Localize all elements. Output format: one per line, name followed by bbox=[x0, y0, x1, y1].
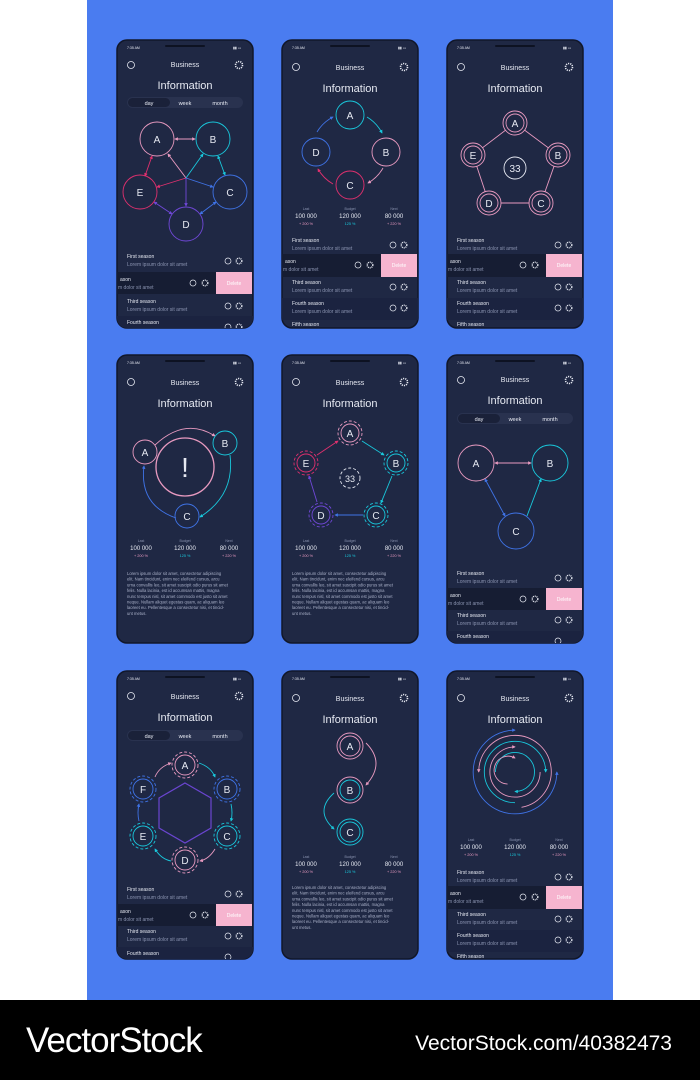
phone 2: circular cycle: Fifth season bbox=[292, 322, 319, 328]
phone 2: circular cycle: ▮▮ ▭ bbox=[398, 46, 407, 50]
phone 2: circular cycle bbox=[282, 40, 418, 328]
phone 4: alert cycle: felis. Nulla lacinia, est id accumsan mattis, magna bbox=[127, 588, 220, 593]
phone 7: hexagon: F bbox=[140, 785, 146, 796]
phone 5: pentagon dashed cycle: Last bbox=[303, 539, 309, 543]
phone 8: vertical flow: felis. Nulla lacinia, est id accumsan mattis, magna bbox=[292, 902, 385, 907]
phone 7: hexagon bbox=[117, 671, 253, 969]
phone 9: spiral rings: + 200 % bbox=[464, 853, 479, 857]
phone 4: alert cycle: C bbox=[183, 512, 191, 523]
phone 7: hexagon: D bbox=[181, 856, 189, 867]
phone 5: pentagon dashed cycle: Budget bbox=[344, 539, 356, 543]
phone 9: spiral rings: Third season bbox=[457, 912, 486, 918]
phone 8: vertical flow: 120 000 bbox=[339, 862, 362, 868]
phone 9: spiral rings: Delete bbox=[557, 895, 571, 901]
phone 9: spiral rings: m dolor sit amet bbox=[448, 899, 484, 905]
phone 7: hexagon: Information bbox=[157, 712, 213, 724]
phone 5: pentagon dashed cycle: 33 bbox=[345, 474, 355, 484]
phone 3: pentagon with 33: 7:35 AM bbox=[457, 46, 470, 50]
phone 2: circular cycle: Third season bbox=[292, 280, 321, 286]
phone 6: triangle: 7:35 AM bbox=[457, 361, 470, 365]
phone 2: circular cycle: C bbox=[346, 181, 354, 192]
phone 5: pentagon dashed cycle: B bbox=[393, 459, 400, 470]
phone 5: pentagon dashed cycle: E bbox=[303, 459, 310, 470]
phone 2: circular cycle: ason bbox=[285, 259, 296, 265]
phone 6: triangle: Fourth season bbox=[457, 634, 489, 640]
phone 3: pentagon with 33: E bbox=[470, 151, 477, 162]
phone 5: pentagon dashed cycle: Information bbox=[322, 398, 378, 410]
phone 9: spiral rings: Lorem ipsum dolor sit amet bbox=[457, 941, 518, 947]
phone 1: five node network: day bbox=[145, 101, 154, 107]
phone 5: pentagon dashed cycle: + 200 % bbox=[299, 554, 314, 558]
phone 4: alert cycle: Last bbox=[138, 539, 144, 543]
phone 5: pentagon dashed cycle bbox=[282, 355, 418, 643]
phone 4: alert cycle: Next bbox=[225, 539, 233, 543]
phone 5: pentagon dashed cycle: D bbox=[317, 511, 325, 522]
phone 8: vertical flow: A bbox=[347, 742, 354, 753]
phone 1: five node network: E bbox=[137, 188, 144, 199]
phone 2: circular cycle: Delete bbox=[392, 263, 406, 269]
phone 3: pentagon with 33: C bbox=[537, 199, 545, 210]
phone 2: circular cycle: 100 000 bbox=[295, 214, 318, 220]
phone 8: vertical flow: unt metus. bbox=[292, 925, 312, 930]
phone 3: pentagon with 33: Fourth season bbox=[457, 301, 489, 307]
phone 2: circular cycle: 7:35 AM bbox=[292, 46, 305, 50]
phone 5: pentagon dashed cycle: laoreet eu. Pellentesque a consectetur nisi, et tincid- bbox=[292, 605, 390, 610]
phone 9: spiral rings: 100 000 bbox=[460, 845, 482, 851]
phone 6: triangle: Business bbox=[501, 377, 530, 384]
phone 1: five node network: Lorem ipsum dolor sit amet bbox=[127, 307, 188, 313]
phone 6: triangle: First season bbox=[457, 571, 484, 577]
phone 4: alert cycle: 7:35 AM bbox=[127, 361, 140, 365]
phone 1: five node network: First season bbox=[127, 254, 154, 260]
phone 8: vertical flow: 80 000 bbox=[385, 862, 404, 868]
phone 5: pentagon dashed cycle: 7:35 AM bbox=[292, 361, 305, 365]
phone 6: triangle: Information bbox=[487, 395, 543, 407]
phone 4: alert cycle: unt metus. bbox=[127, 611, 147, 616]
phone 7: hexagon: Third season bbox=[127, 929, 156, 935]
phone 3: pentagon with 33: ▮▮ ▭ bbox=[563, 46, 572, 50]
phone 7: hexagon: Lorem ipsum dolor sit amet bbox=[127, 895, 188, 901]
phone 1: five node network: month bbox=[212, 101, 228, 107]
phone 4: alert cycle: 80 000 bbox=[220, 546, 239, 552]
phone 6: triangle: C bbox=[512, 527, 520, 538]
phone 5: pentagon dashed cycle: urna convallis leo, sit amet suscipit odio purus sit amet bbox=[292, 582, 394, 587]
phone 3: pentagon with 33: m dolor sit amet bbox=[448, 267, 484, 273]
phone 8: vertical flow: 7:35 AM bbox=[292, 677, 305, 681]
phone 1: five node network: Third season bbox=[127, 299, 156, 305]
phone 6: triangle: week bbox=[508, 417, 522, 423]
phone 4: alert cycle: 125 % bbox=[180, 554, 191, 558]
phone 6: triangle: B bbox=[547, 459, 554, 470]
phone 8: vertical flow: + 220 % bbox=[387, 870, 402, 874]
phone 5: pentagon dashed cycle: neque. Nullam aliquet egestas quam, ac aliquam leo bbox=[292, 600, 390, 604]
phone 6: triangle: ▮▮ ▭ bbox=[563, 361, 572, 365]
phone 6: triangle bbox=[447, 355, 583, 653]
phone 1: five node network: Fourth season bbox=[127, 320, 159, 326]
phone 2: circular cycle: Lorem ipsum dolor sit amet bbox=[292, 246, 353, 252]
phone 8: vertical flow: 100 000 bbox=[295, 862, 318, 868]
phone 5: pentagon dashed cycle: + 220 % bbox=[387, 554, 402, 558]
phone 4: alert cycle: neque. Nullam aliquet egestas quam, ac aliquam leo bbox=[127, 600, 225, 604]
phone 3: pentagon with 33: Lorem ipsum dolor sit amet bbox=[457, 288, 518, 294]
phone 1: five node network: C bbox=[226, 188, 234, 199]
phone 8: vertical flow: 125 % bbox=[345, 870, 356, 874]
phone 5: pentagon dashed cycle: ▮▮ ▭ bbox=[398, 361, 407, 365]
phone 2: circular cycle: A bbox=[347, 111, 354, 122]
phone 5: pentagon dashed cycle: 125 % bbox=[345, 554, 356, 558]
phone 8: vertical flow: ▮▮ ▭ bbox=[398, 677, 407, 681]
phone 8: vertical flow: B bbox=[347, 786, 354, 797]
phone 3: pentagon with 33: Fifth season bbox=[457, 322, 484, 328]
phone 2: circular cycle: Last bbox=[303, 207, 309, 211]
phone 8: vertical flow: Next bbox=[390, 855, 398, 859]
phone 1: five node network: Delete bbox=[227, 281, 241, 287]
phone 8: vertical flow: elit. Nam tincidunt, enim nec eleifend cursus, arcu bbox=[292, 891, 385, 896]
phone 3: pentagon with 33: B bbox=[555, 151, 562, 162]
phone 9: spiral rings: Next bbox=[555, 838, 563, 842]
phone 3: pentagon with 33: D bbox=[485, 199, 493, 210]
phone 6: triangle: Lorem ipsum dolor sit amet bbox=[457, 621, 518, 627]
footer: watermark bar bbox=[0, 1000, 700, 1080]
phone 4: alert cycle bbox=[117, 355, 253, 643]
phone 2: circular cycle: + 200 % bbox=[299, 222, 314, 226]
phone 7: hexagon: month bbox=[212, 734, 228, 740]
phone 4: alert cycle: A bbox=[142, 448, 149, 459]
phone 8: vertical flow: laoreet eu. Pellentesque a consectetur nisi, et tincid- bbox=[292, 919, 390, 924]
phone 9: spiral rings: Information bbox=[487, 714, 543, 726]
phone 5: pentagon dashed cycle: Business bbox=[336, 380, 365, 387]
phone 1: five node network: D bbox=[182, 220, 190, 231]
phone 9: spiral rings: First season bbox=[457, 870, 484, 876]
phone 4: alert cycle: laoreet eu. Pellentesque a consectetur nisi, et tincid- bbox=[127, 605, 225, 610]
phone 8: vertical flow: Business bbox=[336, 696, 365, 703]
phone 7: hexagon: Business bbox=[171, 694, 200, 701]
phone 5: pentagon dashed cycle: elit. Nam tincidunt, enim nec eleifend cursus, arcu bbox=[292, 577, 385, 582]
phone 7: hexagon: C bbox=[223, 832, 231, 843]
phone 9: spiral rings: 80 000 bbox=[550, 845, 569, 851]
phone 2: circular cycle: 125 % bbox=[345, 222, 356, 226]
phone 1: five node network: ason bbox=[120, 277, 131, 283]
phone 7: hexagon: Lorem ipsum dolor sit amet bbox=[127, 937, 188, 943]
phone 3: pentagon with 33: First season bbox=[457, 238, 484, 244]
phone 8: vertical flow: Lorem ipsum dolor sit amet, consectetur adipiscing bbox=[292, 885, 387, 890]
phone 6: triangle: Third season bbox=[457, 613, 486, 619]
phone 5: pentagon dashed cycle: nunc tempus nisl, sit amet commodo est justo sit amet bbox=[292, 594, 393, 599]
phone 5: pentagon dashed cycle: 120 000 bbox=[339, 546, 362, 552]
phone 9: spiral rings: Fourth season bbox=[457, 933, 489, 939]
phone 9: spiral rings: Fifth season bbox=[457, 954, 484, 960]
phone 9: spiral rings: + 220 % bbox=[552, 853, 567, 857]
phone 4: alert cycle: 100 000 bbox=[130, 546, 152, 552]
phone 8: vertical flow: neque. Nullam aliquet egestas quam, ac aliquam leo bbox=[292, 914, 390, 918]
phone 2: circular cycle: Next bbox=[390, 207, 398, 211]
phone 3: pentagon with 33: 33 bbox=[509, 164, 521, 175]
phone 2: circular cycle: Lorem ipsum dolor sit amet bbox=[292, 288, 353, 294]
phone 7: hexagon: m dolor sit amet bbox=[118, 917, 154, 923]
phone 5: pentagon dashed cycle: C bbox=[372, 511, 380, 522]
phone 2: circular cycle: D bbox=[312, 148, 320, 159]
phone 5: pentagon dashed cycle: Next bbox=[390, 539, 398, 543]
phone 5: pentagon dashed cycle: 80 000 bbox=[385, 546, 404, 552]
phone 9: spiral rings: Lorem ipsum dolor sit amet bbox=[457, 920, 518, 926]
phone 6: triangle: Lorem ipsum dolor sit amet bbox=[457, 579, 518, 585]
phone 8: vertical flow bbox=[282, 671, 418, 959]
phone 8: vertical flow: Information bbox=[322, 714, 378, 726]
phone 9: spiral rings: 120 000 bbox=[504, 845, 526, 851]
phone 8: vertical flow: urna convallis leo, sit amet suscipit odio purus sit amet bbox=[292, 896, 394, 901]
phone 7: hexagon: Fourth season bbox=[127, 951, 159, 957]
phone 9: spiral rings: ason bbox=[450, 891, 461, 897]
phone 9: spiral rings: 125 % bbox=[510, 853, 521, 857]
phone 4: alert cycle: urna convallis leo, sit amet suscipit odio purus sit amet bbox=[127, 582, 229, 587]
phone 3: pentagon with 33: Third season bbox=[457, 280, 486, 286]
phone 1: five node network bbox=[117, 40, 253, 338]
phone 4: alert cycle: + 200 % bbox=[134, 554, 149, 558]
phone 3: pentagon with 33: Delete bbox=[557, 263, 571, 269]
phone 8: vertical flow: Budget bbox=[344, 855, 356, 859]
phone 9: spiral rings: Last bbox=[468, 838, 474, 842]
phone 3: pentagon with 33: Lorem ipsum dolor sit amet bbox=[457, 309, 518, 315]
phone 2: circular cycle: m dolor sit amet bbox=[283, 267, 319, 273]
phone 7: hexagon: A bbox=[182, 761, 189, 772]
phone 6: triangle: day bbox=[475, 417, 484, 423]
phone 2: circular cycle: + 220 % bbox=[387, 222, 402, 226]
phone 7: hexagon: First season bbox=[127, 887, 154, 893]
phone 4: alert cycle: Business bbox=[171, 380, 200, 387]
phone 3: pentagon with 33: A bbox=[512, 119, 519, 130]
phone 9: spiral rings: Business bbox=[501, 696, 530, 703]
phone 7: hexagon: day bbox=[145, 734, 154, 740]
phone 7: hexagon: E bbox=[140, 832, 147, 843]
phone 9: spiral rings: 7:35 AM bbox=[457, 677, 470, 681]
footer: watermark bar: VectorStock bbox=[26, 1021, 203, 1060]
phone 6: triangle: Delete bbox=[557, 597, 571, 603]
phone 4: alert cycle: Budget bbox=[179, 539, 191, 543]
phone 2: circular cycle: Business bbox=[336, 65, 365, 72]
phone 3: pentagon with 33: Lorem ipsum dolor sit amet bbox=[457, 246, 518, 252]
phone 9: spiral rings: ▮▮ ▭ bbox=[563, 677, 572, 681]
phone 2: circular cycle: Information bbox=[322, 83, 378, 95]
phone 1: five node network: m dolor sit amet bbox=[118, 285, 154, 291]
phone 1: five node network: Information bbox=[157, 80, 213, 92]
phone 1: five node network: 7:35 AM bbox=[127, 46, 140, 50]
phone 3: pentagon with 33 bbox=[447, 40, 583, 328]
phone 2: circular cycle: First season bbox=[292, 238, 319, 244]
phone 7: hexagon: ▮▮ ▭ bbox=[233, 677, 242, 681]
phone 7: hexagon: ason bbox=[120, 909, 131, 915]
phone 2: circular cycle: 80 000 bbox=[385, 214, 404, 220]
phone 8: vertical flow: nunc tempus nisl, sit amet commodo est justo sit amet bbox=[292, 908, 393, 913]
phone 5: pentagon dashed cycle: 100 000 bbox=[295, 546, 318, 552]
phone 4: alert cycle: 120 000 bbox=[174, 546, 196, 552]
phone 4: alert cycle: Lorem ipsum dolor sit amet, consectetur adipiscing bbox=[127, 571, 222, 576]
phone 6: triangle: ason bbox=[450, 593, 461, 599]
phone 7: hexagon: Delete bbox=[227, 913, 241, 919]
phone 2: circular cycle: 120 000 bbox=[339, 214, 362, 220]
phone 4: alert cycle: elit. Nam tincidunt, enim nec eleifend cursus, arcu bbox=[127, 577, 220, 582]
phone 5: pentagon dashed cycle: felis. Nulla lacinia, est id accumsan mattis, magna bbox=[292, 588, 385, 593]
phone 5: pentagon dashed cycle: Lorem ipsum dolor sit amet, consectetur adipiscing bbox=[292, 571, 387, 576]
phone 8: vertical flow: + 200 % bbox=[299, 870, 314, 874]
phone 7: hexagon: week bbox=[178, 734, 192, 740]
phone 8: vertical flow: C bbox=[346, 828, 354, 839]
footer: watermark bar: VectorStock.com/40382473 bbox=[415, 1032, 672, 1055]
phone 2: circular cycle: Lorem ipsum dolor sit amet bbox=[292, 309, 353, 315]
phone 5: pentagon dashed cycle: A bbox=[347, 429, 354, 440]
phone 8: vertical flow: Last bbox=[303, 855, 309, 859]
phone 1: five node network: B bbox=[210, 135, 217, 146]
phone 1: five node network: Lorem ipsum dolor sit amet bbox=[127, 262, 188, 268]
phone 6: triangle: month bbox=[542, 417, 558, 423]
phone 2: circular cycle: Budget bbox=[344, 207, 356, 211]
phone 9: spiral rings: Budget bbox=[509, 838, 521, 842]
phone 2: circular cycle: Fourth season bbox=[292, 301, 324, 307]
phone 4: alert cycle: ▮▮ ▭ bbox=[233, 361, 242, 365]
phone 1: five node network: ▮▮ ▭ bbox=[233, 46, 242, 50]
phone 3: pentagon with 33: Information bbox=[487, 83, 543, 95]
phone 6: triangle: m dolor sit amet bbox=[448, 601, 484, 607]
phone 6: triangle: A bbox=[473, 459, 480, 470]
phone 3: pentagon with 33: Business bbox=[501, 65, 530, 72]
phone 9: spiral rings bbox=[447, 671, 583, 960]
phone 9: spiral rings: Lorem ipsum dolor sit amet bbox=[457, 878, 518, 884]
phone 1: five node network: Business bbox=[171, 62, 200, 69]
phone 4: alert cycle: + 220 % bbox=[222, 554, 237, 558]
phone 1: five node network: week bbox=[178, 101, 192, 107]
phone 5: pentagon dashed cycle: unt metus. bbox=[292, 611, 312, 616]
phone 4: alert cycle: nunc tempus nisl, sit amet commodo est justo sit amet bbox=[127, 594, 228, 599]
phone 4: alert cycle: Information bbox=[157, 398, 213, 410]
phone 7: hexagon: 7:35 AM bbox=[127, 677, 140, 681]
phone 1: five node network: A bbox=[154, 135, 161, 146]
phone 7: hexagon: B bbox=[224, 785, 231, 796]
phone 4: alert cycle: B bbox=[222, 439, 229, 450]
phone 4: alert cycle: ! bbox=[181, 452, 189, 483]
phone 2: circular cycle: B bbox=[383, 148, 390, 159]
phone 3: pentagon with 33: ason bbox=[450, 259, 461, 265]
